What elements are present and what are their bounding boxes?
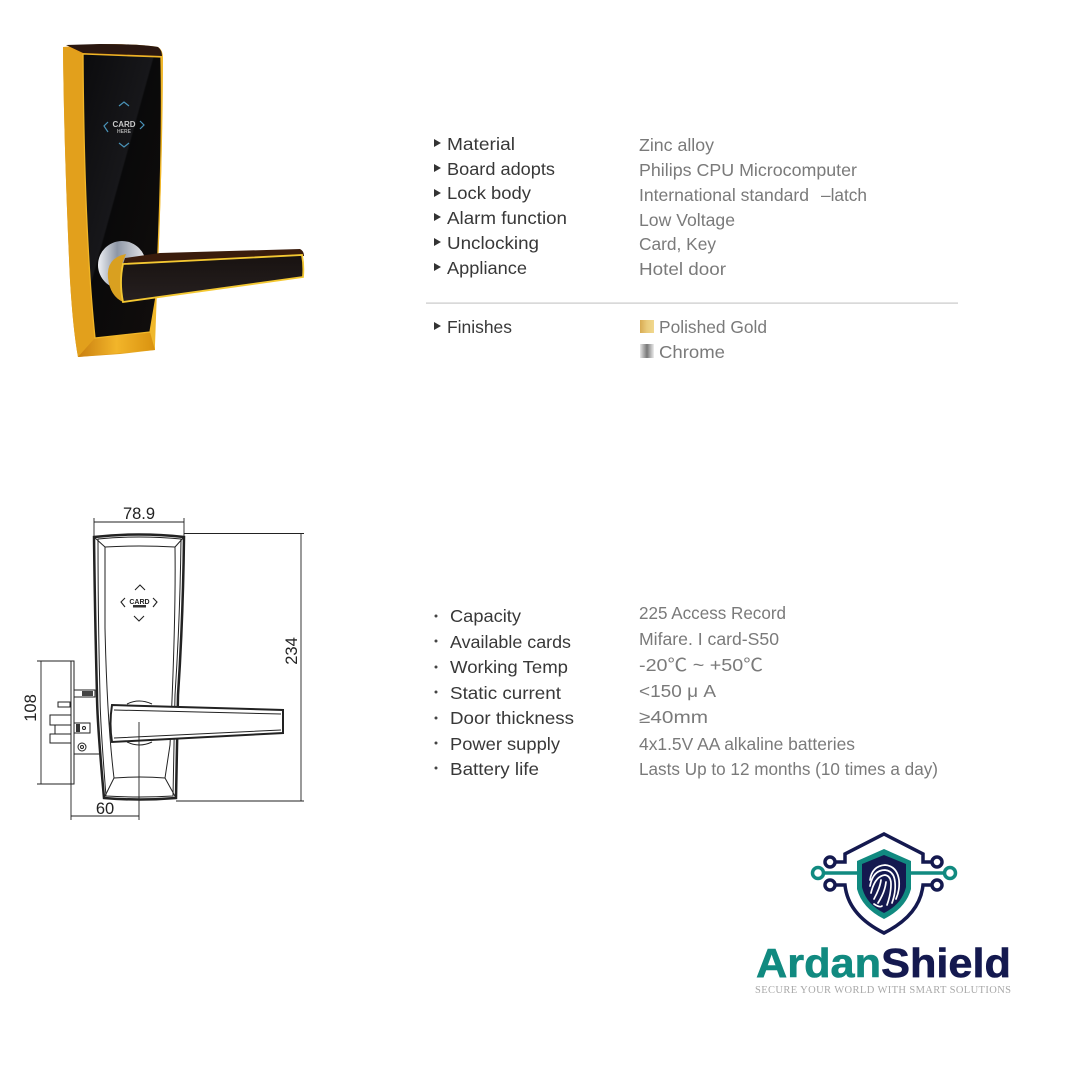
spec values — [639, 135, 867, 279]
spec values: Lasts Up to 12 months (10 times a day) — [639, 759, 938, 779]
spec labels: Available cards — [450, 632, 571, 652]
spec labels: Lock body — [447, 183, 531, 203]
spec labels: Battery life — [450, 759, 539, 779]
spec values: Philips CPU Microcomputer — [639, 160, 857, 180]
spec labels: Door thickness — [450, 708, 574, 728]
spec labels: Appliance — [447, 258, 527, 278]
spec labels — [434, 134, 567, 278]
lock outline — [94, 534, 184, 800]
spec labels: Working Temp — [450, 657, 568, 677]
dimension labels: 108 — [22, 694, 40, 722]
finishes: Chrome — [659, 342, 725, 362]
reader marks: CARD — [129, 599, 150, 606]
spec labels: Capacity — [450, 606, 521, 626]
dimension labels: 60 — [96, 800, 114, 818]
dimension labels — [22, 505, 301, 818]
spec values: International standard — [639, 185, 809, 205]
spec values: Hotel door — [639, 259, 726, 279]
finishes: Finishes — [447, 317, 512, 337]
logo: ArdanShield — [755, 834, 1011, 996]
dimension labels: 78.9 — [123, 505, 155, 523]
spec values: <150 μ A — [639, 681, 716, 701]
panel: electrical specifications — [434, 603, 938, 779]
spec labels: Material — [447, 134, 515, 154]
mortise body — [50, 661, 99, 784]
card reader marks — [104, 102, 144, 147]
spec labels: Alarm function — [447, 208, 567, 228]
spec values: ≥40mm — [639, 707, 708, 727]
dimension labels: 234 — [283, 637, 301, 665]
lever handle — [98, 241, 304, 302]
lever — [110, 701, 283, 745]
black touch panel — [83, 54, 161, 338]
finishes — [434, 317, 767, 362]
tagline: SECURE YOUR WORLD WITH SMART SOLUTIONS — [755, 985, 1011, 996]
card reader marks: HERE — [117, 129, 132, 135]
spec labels: Power supply — [450, 734, 560, 754]
chart: dimensioned technical drawing — [22, 505, 304, 820]
icon: gold door lock photo — [63, 44, 304, 357]
spec values: 4x1.5V AA alkaline batteries — [639, 734, 855, 754]
finishes: Polished Gold — [659, 317, 767, 337]
spec values: –latch — [821, 185, 867, 205]
icon: shield with circuit lines and fingerprint — [812, 834, 956, 933]
spec values: -20℃ ~ +50℃ — [639, 655, 763, 675]
reader marks — [121, 585, 157, 621]
spec labels: Static current — [450, 683, 561, 703]
panel: product specifications — [426, 134, 958, 362]
spec values: 225 Access Record — [639, 603, 786, 623]
card reader marks: CARD — [112, 120, 136, 129]
spec labels: Board adopts — [447, 159, 555, 179]
spec labels: Unclocking — [447, 233, 539, 253]
spec values: Mifare. I card-S50 — [639, 629, 779, 649]
spec values — [639, 603, 938, 779]
spec values: Low Voltage — [639, 210, 735, 230]
wordmark: ArdanShield — [756, 940, 1011, 986]
spec values: Card, Key — [639, 234, 716, 254]
spec labels — [434, 606, 574, 779]
fingerprint — [870, 865, 899, 907]
lock backplate — [63, 44, 163, 357]
dimension lines — [37, 518, 304, 820]
spec values: Zinc alloy — [639, 135, 714, 155]
